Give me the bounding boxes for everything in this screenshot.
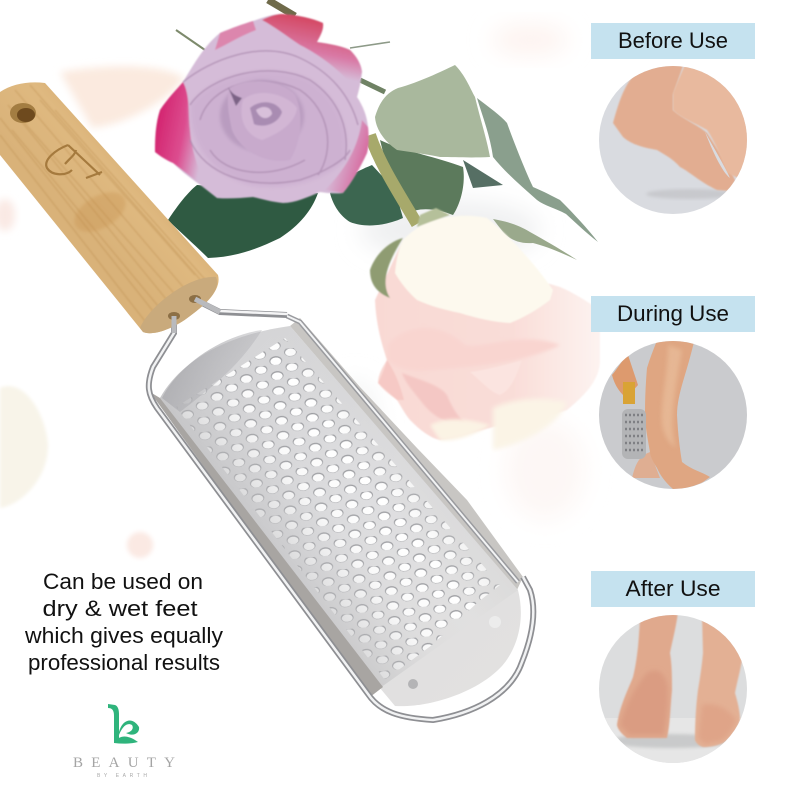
holes	[170, 330, 510, 690]
rose petal folds	[402, 373, 470, 423]
logo: beauty by earth: BEAUTY	[73, 755, 175, 771]
mid petal shading	[190, 71, 346, 187]
text block: feature claim: professional results	[28, 650, 220, 675]
metal shading	[160, 326, 518, 688]
photo: dry feet	[599, 60, 750, 214]
pink edge lower right	[325, 120, 369, 193]
panel: during use	[591, 296, 755, 489]
heading: during use: During Use	[617, 301, 729, 326]
panel: after use	[591, 571, 755, 763]
heading: after use	[591, 571, 755, 607]
leaf: dark bottom left	[168, 185, 318, 258]
left foot	[617, 612, 678, 738]
grater side band left	[150, 392, 383, 697]
rose inner shadow	[220, 80, 304, 152]
pink strip upper left	[215, 21, 256, 50]
handle hole	[10, 103, 36, 123]
leaf: sage upper	[375, 65, 490, 157]
heading: during use	[591, 296, 755, 332]
handle logo engraving	[46, 145, 102, 178]
grater plate	[160, 326, 521, 706]
photo: filing foot	[599, 338, 747, 489]
reflection shade	[162, 330, 262, 412]
logo: beauty by earth: BY EARTH	[97, 773, 147, 779]
wooden handle	[0, 82, 219, 333]
petal outlines	[183, 51, 358, 183]
white pink rose	[370, 208, 600, 450]
outer frame	[149, 312, 533, 720]
handle body	[0, 82, 219, 333]
logo: beauty by earth	[73, 704, 175, 779]
logo mark	[108, 704, 139, 744]
stem: main	[370, 135, 417, 224]
rose top cream petal	[395, 216, 553, 323]
right rail	[287, 316, 518, 582]
leaf: grey green right	[477, 98, 598, 242]
text block: feature claim: dry & wet feet	[42, 596, 198, 621]
leaf: dark right small	[463, 160, 503, 188]
grain patch	[68, 184, 132, 240]
leaf: lower right	[493, 219, 577, 260]
panel: before use	[591, 23, 755, 214]
rose core	[241, 93, 297, 140]
pink petal edge top	[262, 14, 362, 90]
photo: smooth feet	[599, 612, 747, 763]
lone holes	[408, 679, 418, 689]
rose base	[155, 14, 369, 203]
handle end cap	[140, 277, 217, 333]
purple rose	[155, 14, 369, 203]
right foot	[695, 616, 742, 747]
leaf: mid green	[380, 140, 464, 215]
grater	[149, 297, 533, 720]
top wire	[192, 298, 287, 315]
text block: feature claim: which gives equally	[24, 623, 223, 648]
heading: after use: After Use	[626, 576, 720, 601]
petal: faint pink behind handle	[60, 66, 184, 128]
heading: before use: Before Use	[618, 28, 728, 53]
wood grain	[0, 85, 210, 325]
stems and leaves	[168, 0, 598, 260]
rose pink body	[375, 240, 600, 440]
petal: left blurred cream petal	[0, 386, 48, 508]
pink petal edge left	[155, 82, 206, 188]
rose sepal left	[370, 238, 403, 298]
wire entering handle	[168, 295, 220, 333]
grater side band right	[290, 318, 523, 590]
heading: before use	[591, 23, 755, 59]
leaf: dark centre	[330, 165, 403, 225]
text block: feature claim	[24, 569, 223, 675]
rose cream patch	[493, 399, 567, 450]
text block: feature claim: Can be used on	[43, 569, 203, 594]
rose sepal top	[417, 208, 450, 227]
